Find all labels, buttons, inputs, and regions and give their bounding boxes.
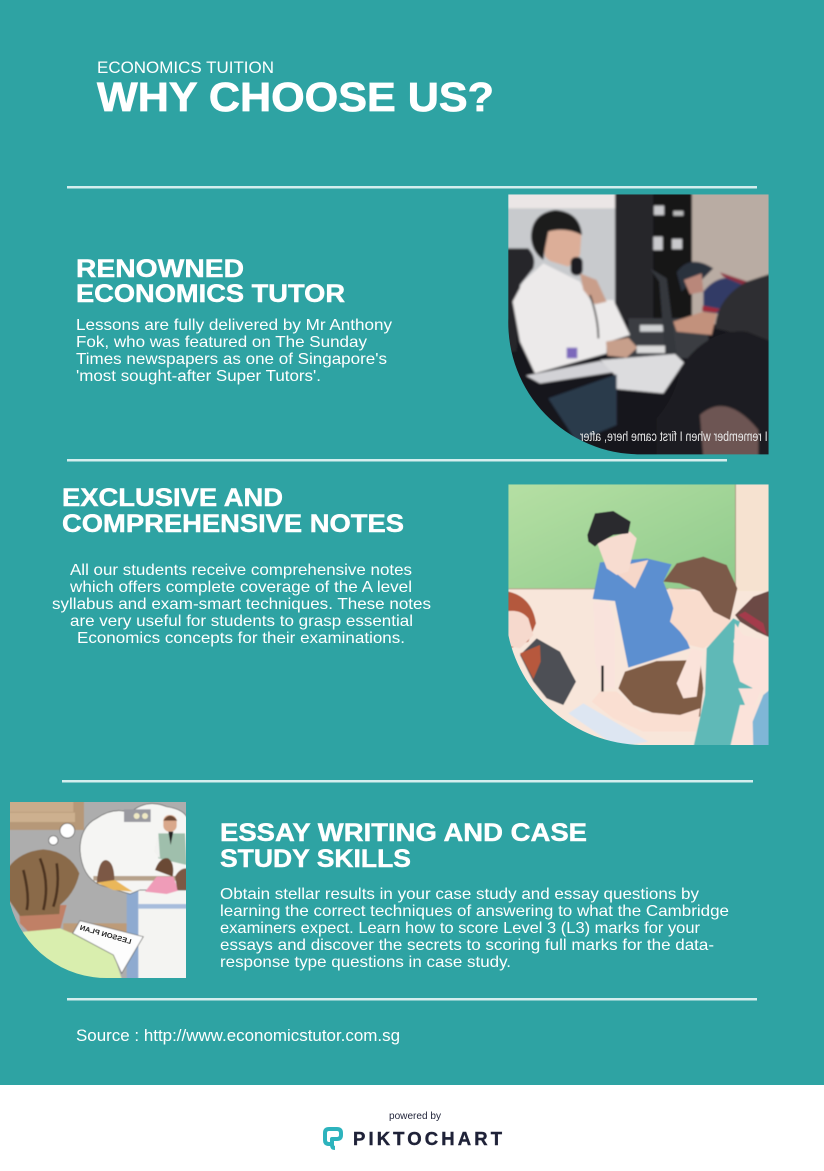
tutor head xyxy=(543,230,582,267)
icon: piktochart logo xyxy=(325,1129,341,1148)
lesson plan xyxy=(73,921,143,973)
illustration: students studying xyxy=(505,481,772,748)
raised hand xyxy=(676,659,702,699)
panel: renowned economics tutor xyxy=(76,191,772,458)
text block: notes description: which offers complete coverage of the A level xyxy=(69,579,412,596)
notebook xyxy=(568,703,648,747)
heading: essay writing: ESSAY WRITING AND CASE xyxy=(220,819,587,847)
text block: essay description xyxy=(220,886,729,971)
footer band xyxy=(0,1085,824,1171)
microphone and hand xyxy=(580,273,607,304)
heading: exclusive notes: EXCLUSIVE AND xyxy=(62,484,283,512)
heading: exclusive notes: COMPREHENSIVE NOTES xyxy=(62,510,404,538)
foreground student hair xyxy=(715,273,772,342)
photo: tutor speaking in class xyxy=(505,191,772,458)
text block: tutor description xyxy=(76,317,392,385)
text block: tutor description: 'most sought-after Super Tutors'. xyxy=(76,368,321,385)
text block: essay description: learning the correct techniques of answering to what the Cambridge xyxy=(220,903,729,920)
front student xyxy=(668,588,730,648)
heading: essay writing xyxy=(220,819,587,873)
eyebrow heading: ECONOMICS TUITION xyxy=(97,59,274,77)
text block: notes description: are very useful for students to grasp essential xyxy=(70,613,413,630)
text block: notes description: syllabus and exam-smart techniques. These notes xyxy=(52,596,431,613)
heading: essay writing: STUDY SKILLS xyxy=(220,845,411,873)
text block: tutor description: Lessons are fully delivered by Mr Anthony xyxy=(76,317,392,334)
tutor shirt xyxy=(513,263,630,373)
text block: tutor description: Fok, who was featured on The Sunday xyxy=(76,334,367,351)
navy chair foreground xyxy=(548,374,617,442)
papers xyxy=(526,361,617,383)
desk behind tutor xyxy=(628,318,708,358)
main title: WHY CHOOSE US? xyxy=(97,74,494,120)
student neck xyxy=(18,904,67,932)
illustration: student imagining lesson xyxy=(7,799,190,982)
woman on right xyxy=(732,623,754,688)
panel: exclusive and comprehensive notes xyxy=(52,481,772,748)
student in cap xyxy=(703,278,747,313)
heading: renowned tutor: ECONOMICS TUTOR xyxy=(76,280,345,308)
mirrored lesson plan text: LESSON PLAN xyxy=(79,925,132,946)
text block: essay description: response type questions in case study. xyxy=(220,954,511,971)
text block: tutor description: Times newspapers as one of Singapore's xyxy=(76,351,387,368)
monitor xyxy=(652,270,672,332)
thought cloud xyxy=(80,804,188,894)
title block xyxy=(97,59,494,120)
text block: notes description xyxy=(52,562,431,647)
powered by label: powered by xyxy=(389,1111,441,1122)
source line: Source : http://www.economicstutor.com.sg xyxy=(76,1027,400,1045)
text block: notes description: Economics concepts for their examinations. xyxy=(77,630,405,647)
trousers xyxy=(618,660,703,718)
text block: notes description: All our students receive comprehensive notes xyxy=(70,562,412,579)
text block: essay description: essays and discover the secrets to scoring full marks for the data- xyxy=(220,937,714,954)
student hair xyxy=(7,849,79,916)
heading: renowned tutor: RENOWNED xyxy=(76,255,244,283)
shirt xyxy=(22,928,122,978)
text block: essay description: Obtain stellar results in your case study and essay questions by xyxy=(220,886,699,903)
photo subtitle: I remember when I first came here, after xyxy=(580,428,768,444)
chair xyxy=(505,248,534,352)
panel: essay writing and case study skills xyxy=(7,799,729,982)
standing student xyxy=(593,602,615,688)
piktochart wordmark: PIKTOCHART xyxy=(353,1128,503,1149)
text block: essay description: examiners expect. Learn how to score Level 3 (L3) marks for your xyxy=(220,920,701,937)
heading: exclusive notes xyxy=(62,484,404,538)
heading: renowned tutor xyxy=(76,255,345,308)
woman on left xyxy=(505,591,536,648)
